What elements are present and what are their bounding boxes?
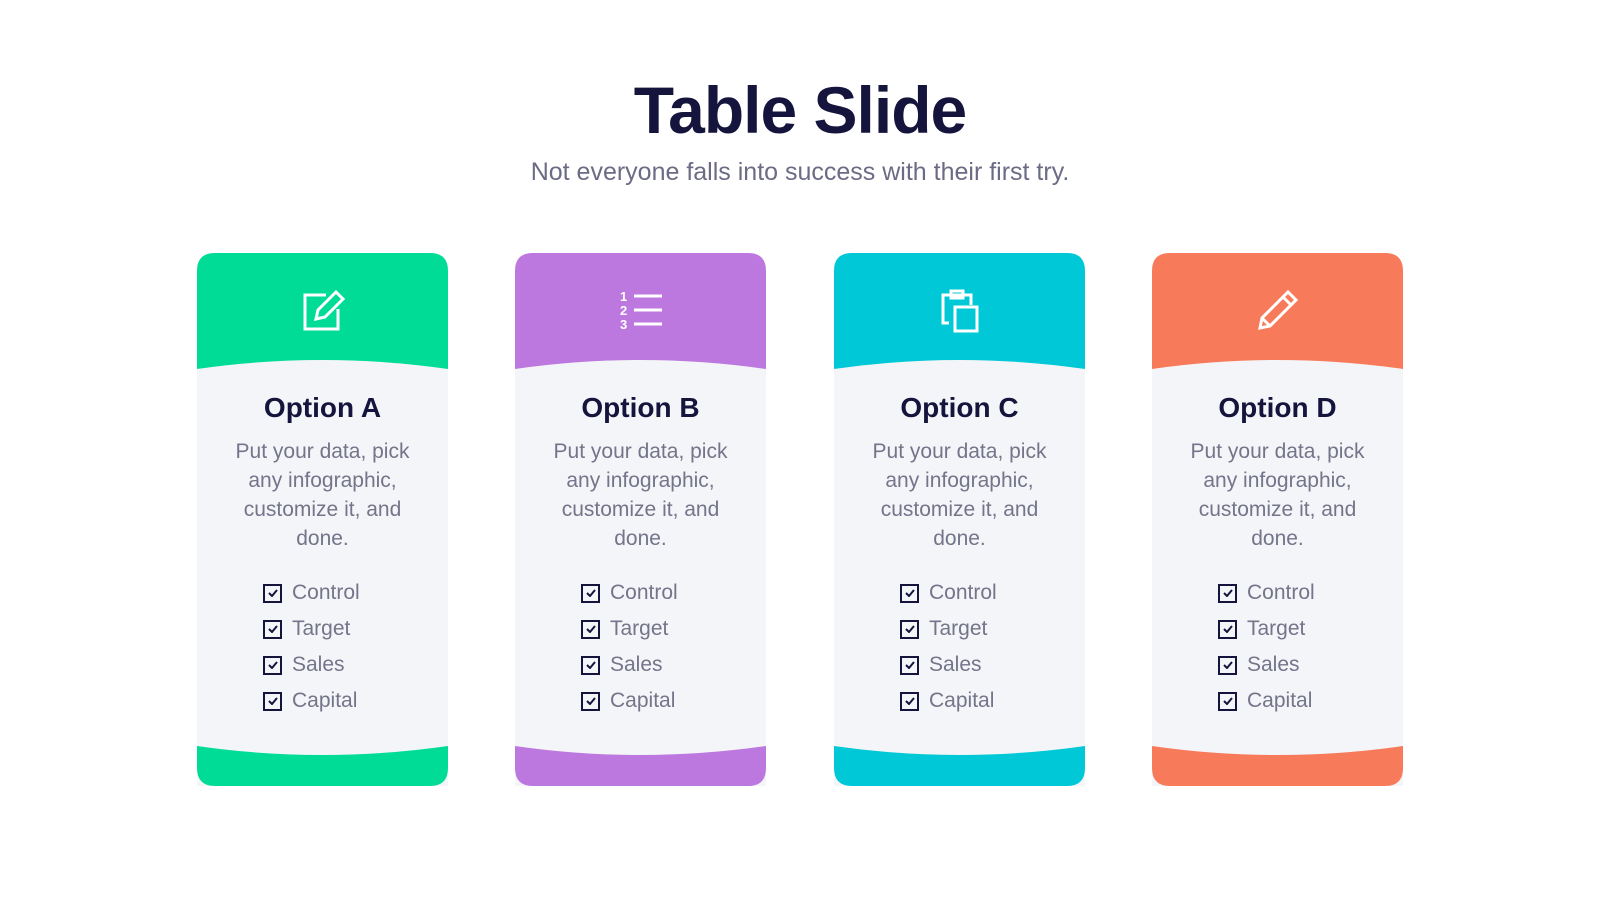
text: Put your data, pick any infographic, customize it, and done. <box>554 440 727 550</box>
checklist <box>263 581 360 712</box>
checklist: Control <box>292 581 360 604</box>
text: Put your data, pick any infographic, customize it, and done. <box>873 440 1046 550</box>
icon: pencil <box>1258 290 1298 330</box>
icon: numbered list: 3 <box>620 317 627 332</box>
text: Put your data, pick any infographic, customize it, and done. <box>236 440 409 550</box>
checklist: Target <box>292 617 350 640</box>
title: Table Slide <box>634 73 966 147</box>
panel: option A <box>197 253 448 786</box>
checklist: Capital <box>610 689 675 712</box>
checklist: Sales <box>610 653 663 676</box>
heading: Option D <box>1218 392 1337 423</box>
panel: option B <box>515 253 766 786</box>
checklist: Sales <box>1247 653 1300 676</box>
checklist <box>1218 581 1315 712</box>
icon: edit <box>304 290 345 330</box>
heading: Option A <box>264 392 381 423</box>
checklist: Control <box>610 581 678 604</box>
icon: clipboard <box>942 290 978 332</box>
checklist: Capital <box>929 689 994 712</box>
checklist: Target <box>929 617 987 640</box>
checklist: Capital <box>292 689 357 712</box>
panel: option C <box>834 253 1085 786</box>
checklist: Sales <box>292 653 345 676</box>
checklist: Target <box>610 617 668 640</box>
checklist: Target <box>1247 617 1305 640</box>
checklist: Control <box>929 581 997 604</box>
checklist: Capital <box>1247 689 1312 712</box>
icon: numbered list <box>620 289 662 332</box>
heading: Option C <box>900 392 1019 423</box>
checklist: Control <box>1247 581 1315 604</box>
icon: numbered list: 2 <box>620 303 627 318</box>
heading: Option B <box>581 392 700 423</box>
panel: option D <box>1152 253 1403 786</box>
checklist <box>900 581 997 712</box>
subtitle: Not everyone falls into success with their first try. <box>531 158 1069 186</box>
checklist: Sales <box>929 653 982 676</box>
checklist <box>581 581 678 712</box>
icon: numbered list: 1 <box>620 289 627 304</box>
text: Put your data, pick any infographic, customize it, and done. <box>1191 440 1364 550</box>
